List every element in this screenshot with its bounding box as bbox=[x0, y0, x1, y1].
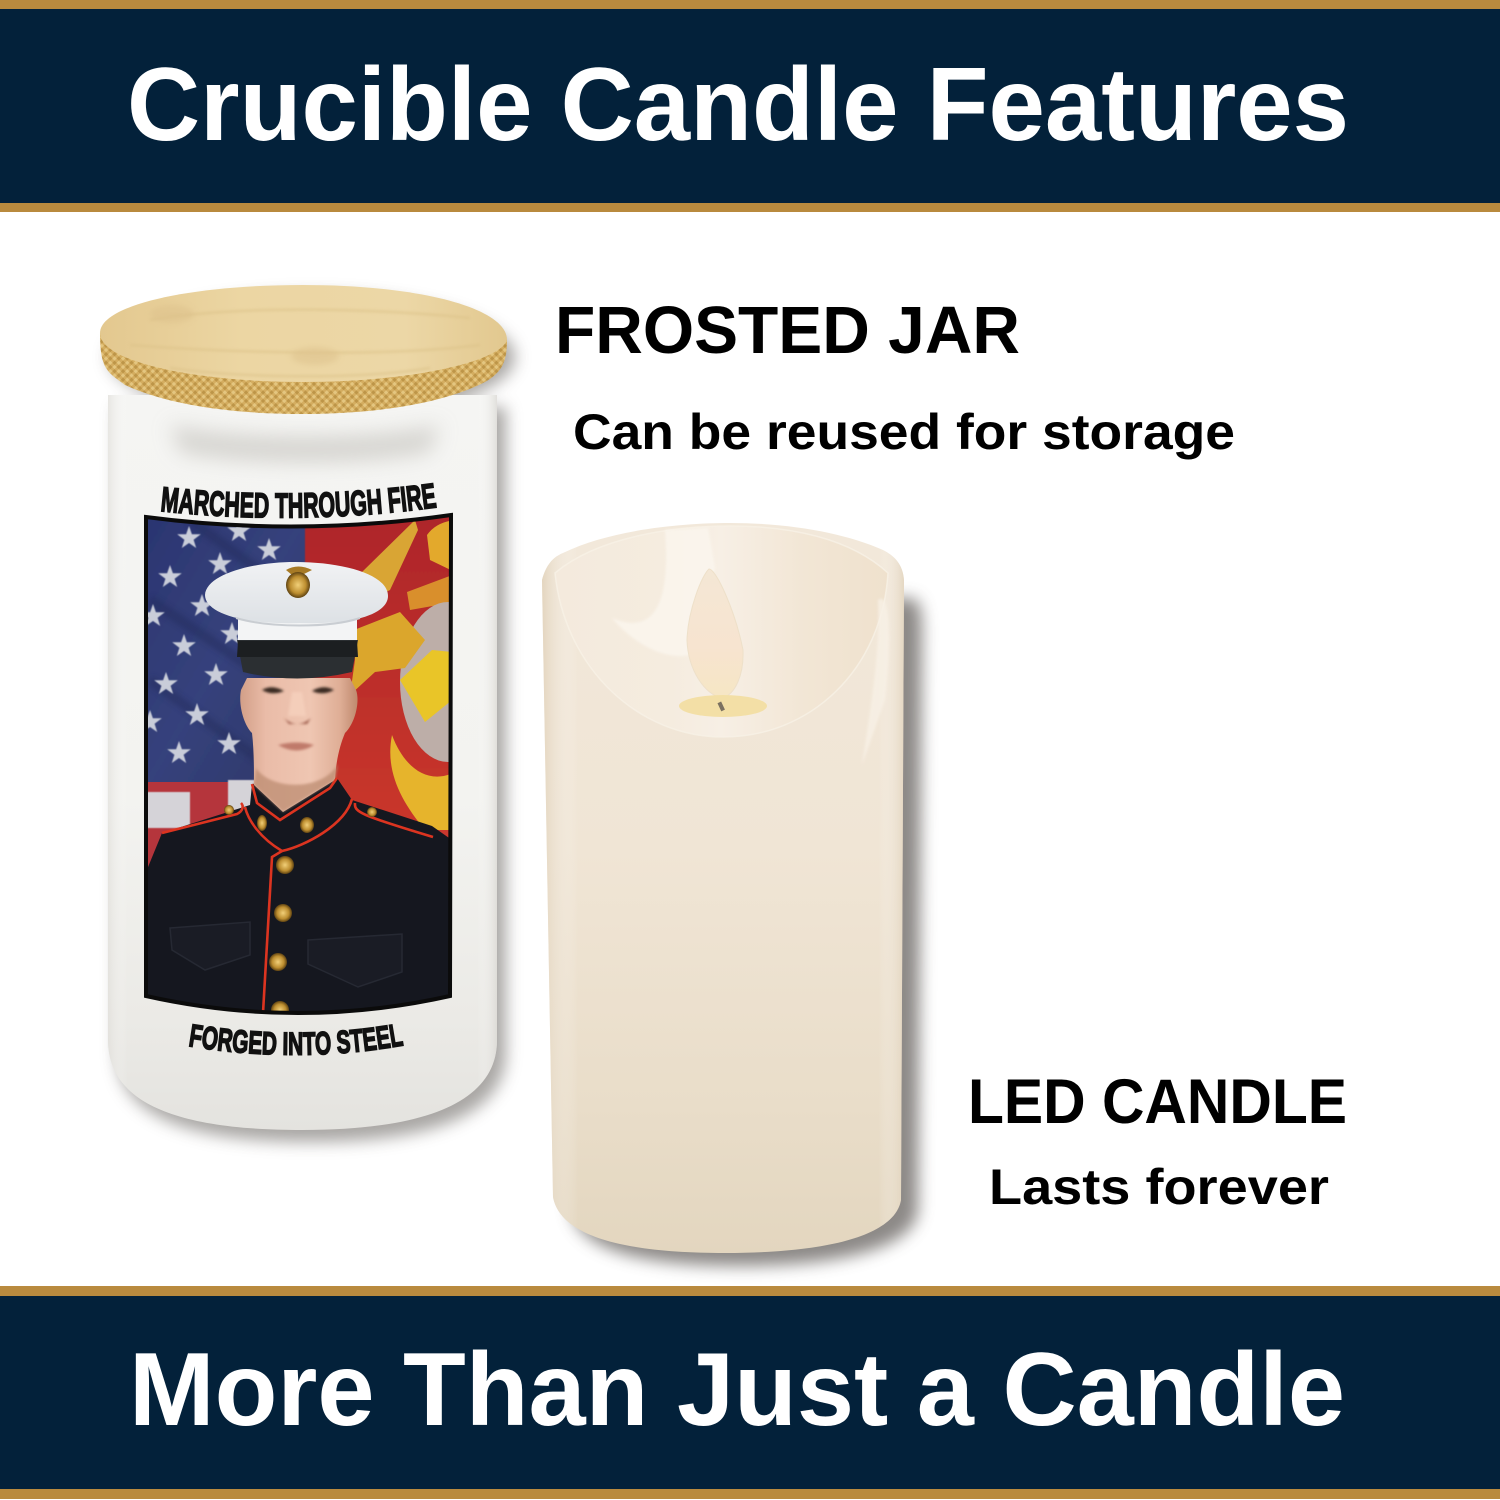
description: LED candle: Lasts forever bbox=[989, 1159, 1329, 1215]
LED candle bbox=[542, 523, 922, 1266]
photo portrait bbox=[144, 512, 453, 1015]
description: frosted jar: Can be reused for storage bbox=[573, 404, 1235, 460]
wick pool bbox=[679, 695, 767, 717]
feature: LED candle bbox=[968, 1067, 1347, 1215]
bottom banner bbox=[0, 1286, 1500, 1499]
top banner bbox=[0, 0, 1500, 212]
candle shadow bbox=[566, 598, 922, 1266]
cap emblem bbox=[286, 566, 312, 598]
photo border bbox=[146, 515, 451, 1013]
title: Crucible Candle Features bbox=[127, 47, 1349, 163]
photo jar bbox=[100, 285, 524, 1152]
collar piping bbox=[162, 778, 433, 1013]
jar caption bottom: FORGED INTO STEEL bbox=[188, 1024, 404, 1056]
jar body bbox=[108, 395, 497, 1130]
face and neck bbox=[240, 678, 358, 812]
bowl highlight bbox=[612, 528, 715, 656]
facial features bbox=[262, 687, 334, 750]
LED flame bbox=[687, 569, 743, 698]
candle body bbox=[542, 523, 904, 1253]
pocket flaps bbox=[170, 922, 402, 987]
jacket bbox=[146, 778, 452, 1030]
jar shadow bbox=[109, 295, 515, 1142]
candle bowl bbox=[555, 526, 888, 737]
heading: LED candle: LED CANDLE bbox=[968, 1067, 1347, 1137]
neck shadow bbox=[254, 764, 338, 812]
body highlight bbox=[862, 599, 889, 765]
feature: frosted jar bbox=[555, 293, 1235, 460]
cap bbox=[205, 562, 388, 678]
jar caption top: MARCHED THROUGH FIRE bbox=[160, 482, 437, 518]
wooden lid bbox=[100, 285, 507, 414]
Marine Corps flag bbox=[304, 517, 449, 838]
jacket buttons bbox=[224, 805, 377, 1011]
heading: frosted jar: FROSTED JAR bbox=[555, 293, 1020, 368]
tagline: More Than Just a Candle bbox=[129, 1332, 1345, 1448]
wick bbox=[717, 702, 725, 711]
frosted neck shading bbox=[170, 425, 440, 462]
American flag bbox=[148, 519, 306, 867]
